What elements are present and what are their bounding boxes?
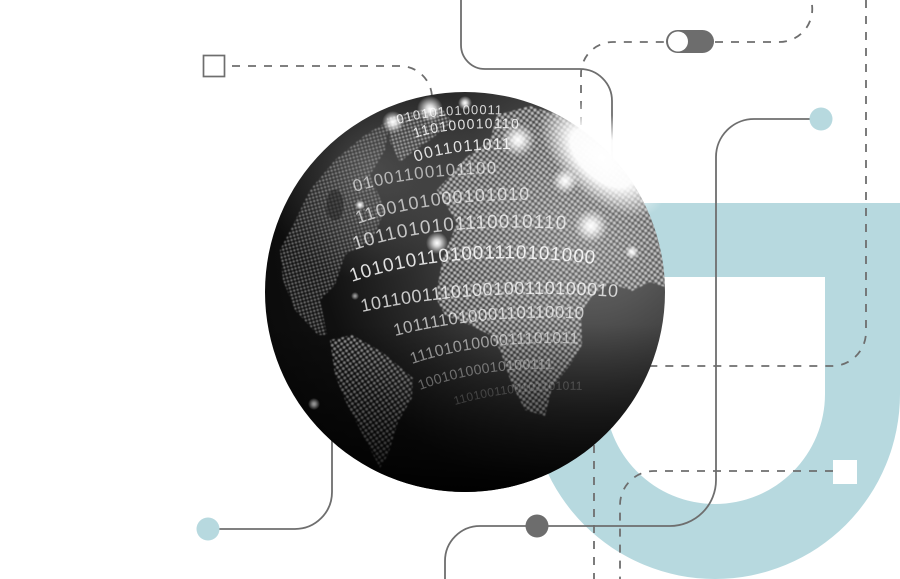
dashed connector from square outline [232, 66, 432, 97]
binary text rows: 1100101000101010 [356, 187, 528, 224]
teal dot top right [810, 108, 832, 130]
binary text rows: 10010100010100111 [418, 359, 552, 390]
globe [265, 92, 665, 492]
hudson bay [326, 189, 344, 221]
teal dot bottom left [196, 518, 220, 540]
continent: north america [280, 120, 390, 335]
binary text rows: 1011001110100100110100010 [362, 282, 618, 312]
square outline node [204, 56, 224, 76]
dark dot [526, 514, 548, 538]
bottom shadow [274, 332, 658, 492]
continent: greenland [387, 106, 452, 162]
continent: eurasia and africa [437, 106, 668, 416]
binary text rows: 01001100101100 [353, 162, 496, 191]
solid connector from top to globe [461, 0, 612, 158]
dashed connector from white square [620, 471, 833, 579]
binary text rows: 1110101000011101011 [410, 332, 578, 364]
teal J shape [530, 203, 900, 579]
solid connector from dark dot to bottom [445, 526, 526, 579]
light spots [308, 96, 639, 410]
binary text rows: 0011011011 [414, 138, 510, 161]
binary text rows: 1011010101110010110 [353, 214, 566, 250]
toggle switch icon [666, 30, 714, 53]
glare top right [519, 77, 685, 239]
dashed vertical connector [593, 445, 595, 579]
solid connector from teal dot to dark dot [548, 119, 810, 526]
land masses [280, 106, 668, 468]
binary text rows [350, 105, 618, 405]
white square node [833, 460, 857, 484]
continent: south america [330, 335, 413, 468]
binary text rows: 0101010100011 [396, 105, 502, 124]
binary text rows: 110100010110 [414, 118, 518, 138]
dashed connector through toggle [581, 0, 812, 125]
solid connector bottom left [219, 440, 332, 529]
binary text rows: 1010101101001110101000 [350, 245, 594, 282]
binary text rows: 1101001100101101011 [454, 381, 582, 405]
binary text rows: 10111101000110110010 [394, 306, 584, 336]
dashed connector on right edge [650, 0, 866, 366]
